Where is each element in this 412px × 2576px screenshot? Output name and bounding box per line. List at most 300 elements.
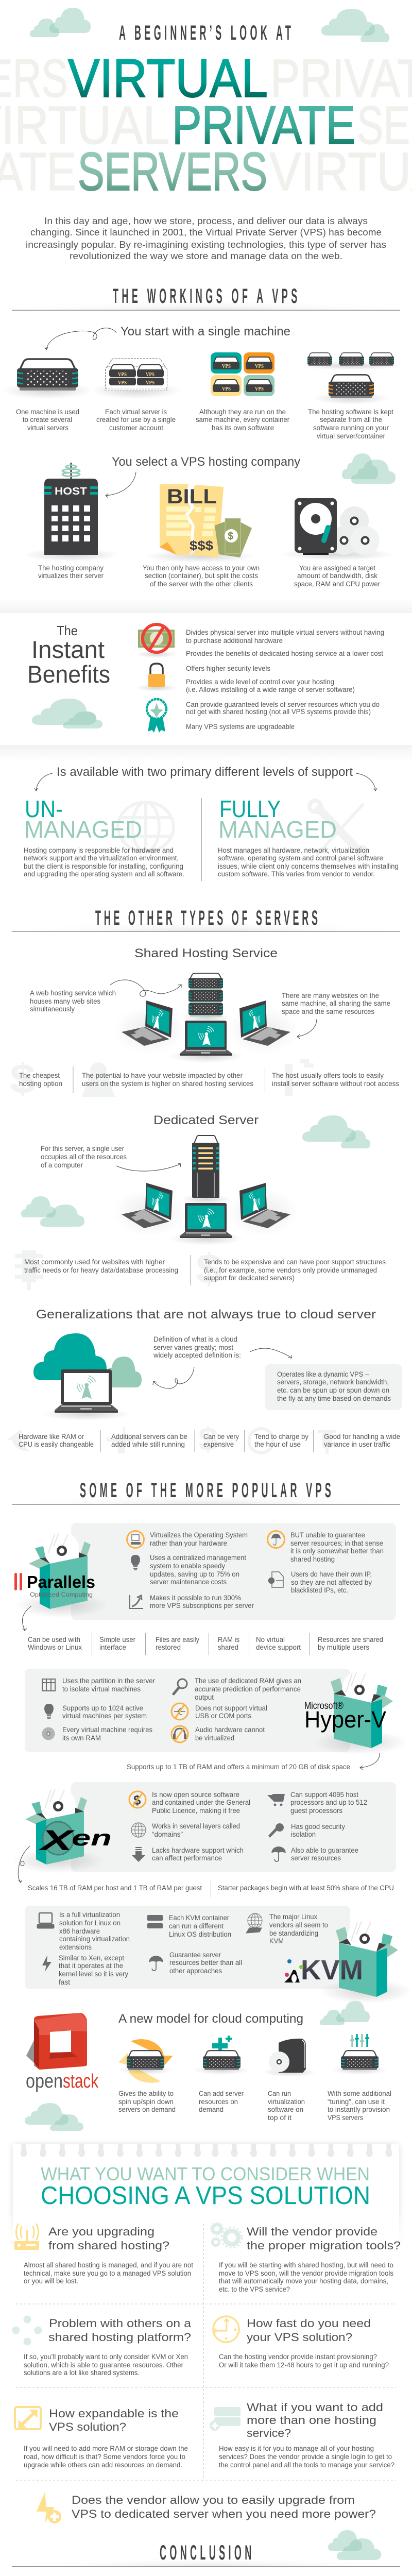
panel: definition box: etc. can be spun up or spun down on bbox=[277, 1386, 389, 1394]
list: xen right: Has good security bbox=[291, 1823, 345, 1831]
icon: torn bill and money: BILL bbox=[167, 485, 217, 508]
panel: unmanaged: MANAGED bbox=[24, 816, 142, 843]
icon: network nodes bbox=[12, 2315, 42, 2345]
list: hyper-v right: output bbox=[195, 1693, 214, 1701]
list: hyper-v right: Audio hardware cannot bbox=[195, 1726, 265, 1734]
icon: torn bill and money: $ bbox=[228, 531, 233, 542]
icon: computer in ring bbox=[127, 1531, 144, 1548]
icon: document bbox=[269, 1572, 283, 1587]
icon: two server units bbox=[147, 1915, 163, 1928]
captions: openstack: VPS servers bbox=[328, 2114, 363, 2122]
watermark icons: shared row bbox=[10, 1056, 314, 1103]
section heading: the workings of a VPS bbox=[12, 284, 400, 311]
question: multiple hosting: How easy is it for you to manage all of your hosting bbox=[219, 2445, 374, 2452]
captions: workings row one: separate from all the bbox=[320, 416, 382, 423]
text: hyper-v fact: Supports up to 1 TB of RAM and offers a minimum of 20 GB of disk space bbox=[127, 1763, 350, 1771]
panel: definition box: the fly at any time based on demands bbox=[277, 1395, 391, 1402]
arrow: parallels to row bbox=[22, 1606, 31, 1631]
row: shared hosting facts: hosting option bbox=[19, 1080, 62, 1088]
row: cloud facts: Good for handling a wide bbox=[324, 1433, 400, 1440]
icon: bulb bbox=[131, 1555, 140, 1570]
box: kvm bbox=[319, 1920, 412, 2004]
intro paragraph: revolutionized the way we store and manage data on the web. bbox=[70, 251, 342, 261]
arrow: curly to cloud laptop bbox=[153, 1367, 194, 1388]
row: shared hosting facts: The cheapest bbox=[19, 1072, 60, 1079]
list: xen left bbox=[152, 1791, 250, 1862]
row: parallels facts: Resources are shared bbox=[318, 1636, 383, 1643]
list: xen left: Works in several layers called bbox=[152, 1822, 240, 1830]
icon: open source no cost: $ bbox=[133, 1792, 141, 1808]
list: kvm col three: The major Linux bbox=[269, 1913, 317, 1921]
icon: hosting software separate from containers bbox=[300, 353, 403, 404]
icon: open source no cost bbox=[129, 1791, 146, 1808]
arrow: curly to machine bbox=[45, 328, 116, 350]
band: top of instant benefits bbox=[0, 598, 412, 613]
text: cloud definition bbox=[153, 1335, 241, 1359]
row: parallels facts: RAM is bbox=[218, 1636, 239, 1643]
list: xen left: Lacks hardware support which bbox=[152, 1846, 244, 1854]
background clouds: header left bbox=[30, 8, 91, 37]
icon: host building: HOST bbox=[55, 486, 87, 497]
logo: xen: en bbox=[72, 1826, 112, 1851]
logo: parallels: Optimized Computing bbox=[30, 1591, 93, 1598]
section heading: popular VPS bbox=[12, 1479, 400, 1505]
arrow: to definition box bbox=[250, 1348, 291, 1358]
panel: fully managed: software, operating system and control panel software bbox=[218, 854, 383, 862]
heading: choosing a VPS bbox=[41, 2163, 370, 2210]
list: parallels pros: Virtualizes the Operating System bbox=[150, 1531, 248, 1539]
section heading: other types of servers bbox=[12, 906, 400, 932]
band: bottom of instant benefits bbox=[0, 745, 412, 761]
icon: umbrella bbox=[271, 1846, 286, 1861]
question: expandable: upgrade while others can add resources on demand. bbox=[24, 2461, 182, 2469]
icon: virtual servers in outline: VPS bbox=[146, 372, 154, 378]
question: upgrading: Almost all shared hosting is managed, and if you are not bbox=[24, 2261, 193, 2269]
list: benefits: Offers higher security levels bbox=[186, 665, 270, 672]
list: benefits: Divides physical server into multiple virtual servers without having bbox=[186, 629, 384, 636]
list: kvm col one: containing virtualization bbox=[59, 1935, 130, 1943]
row: shared hosting facts: users on the system is higher on shared hosting services bbox=[82, 1080, 253, 1088]
icon: router bbox=[14, 2224, 39, 2250]
captions: openstack: demand bbox=[199, 2106, 224, 2113]
question: migration tools bbox=[219, 2225, 401, 2293]
list: kvm col one: fast bbox=[59, 1978, 70, 1986]
captions: workings row two bbox=[38, 564, 380, 588]
question: expandable: How expandable is the bbox=[49, 2407, 179, 2420]
captions: workings row one: customer account bbox=[109, 424, 163, 432]
captions: workings row one: has its own software bbox=[212, 424, 274, 432]
panel: unmanaged: network support and the virtualization environment, bbox=[24, 854, 179, 862]
list: xen right: server resources bbox=[291, 1854, 341, 1862]
logo: xen: X bbox=[38, 1824, 76, 1856]
subheading: single machine: You start with a single machine bbox=[121, 325, 290, 338]
row: dedicated facts: support for dedicated servers) bbox=[204, 1274, 295, 1282]
intro paragraph: changing. Since it launched in 2001, the Virtual Private Server (VPS) has become bbox=[30, 227, 382, 238]
box: parallels bbox=[15, 1532, 108, 1618]
icon: umbrella in ring bbox=[268, 1531, 284, 1548]
row: parallels facts: No virtual bbox=[256, 1636, 285, 1643]
icon: partition grid bbox=[42, 1679, 55, 1691]
list: kvm col two: can run a different bbox=[169, 1922, 224, 1930]
panel: unmanaged: but the client is responsible for installing, configuring bbox=[24, 862, 183, 870]
captions: workings row one bbox=[16, 408, 393, 440]
list: hyper-v right: Does not support virtual bbox=[195, 1704, 267, 1712]
heading: the instant benefits: Benefits bbox=[27, 660, 110, 688]
text: cloud definition: Definition of what is a cloud bbox=[153, 1335, 237, 1343]
question: expandable: If you will need to add more RAM or storage down the bbox=[24, 2445, 188, 2452]
icon: padlock bbox=[136, 664, 177, 691]
icon: cart bbox=[267, 1794, 285, 1806]
arrow: to tower bbox=[116, 1163, 181, 1171]
list: parallels pros: updates, saving up to 75% on bbox=[150, 1570, 239, 1578]
question: upgrade to dedicated: VPS to dedicated server when you need more power? bbox=[72, 2507, 376, 2520]
row: parallels facts: restored bbox=[156, 1643, 181, 1651]
question: expandable: road, how difficult is that? Some vendors force you to bbox=[24, 2453, 185, 2461]
question: shared platform: Problem with others on a bbox=[49, 2317, 192, 2330]
list: kvm col two: Each KVM container bbox=[169, 1914, 229, 1922]
list: parallels cons: it is only somewhat better than bbox=[290, 1547, 384, 1555]
watermark icons: dedicated row: $ bbox=[196, 1246, 222, 1293]
captions: workings row two: of the server with the other clients bbox=[150, 580, 253, 588]
icon: host building bbox=[24, 463, 118, 562]
row: xen facts: Scales 16 TB of RAM per host and 1 TB of RAM per guest bbox=[28, 1884, 202, 1892]
row: shared hosting facts: install server software without root access bbox=[272, 1080, 399, 1088]
row: shared hosting facts bbox=[19, 1066, 399, 1093]
question: how fast: Can the hosting vendor provide instant provisioning? bbox=[219, 2353, 377, 2361]
question: migration tools: Will the vendor provide bbox=[247, 2225, 377, 2238]
text: single user: occupies all of the resources bbox=[41, 1153, 127, 1161]
text: web hosting description: houses many web sites bbox=[30, 997, 100, 1005]
captions: openstack: Can add server bbox=[199, 2090, 244, 2097]
list: benefits: Can provide guaranteed levels of server resources which you do bbox=[186, 701, 380, 708]
question: upgrading: from shared hosting? bbox=[48, 2239, 169, 2252]
panel: notepaper bbox=[0, 2144, 412, 2247]
icon: clock bbox=[213, 2316, 239, 2342]
panel: fully managed: Host manages all hardware, network, virtualization bbox=[218, 846, 369, 854]
list: xen left: “domains” bbox=[152, 1831, 183, 1838]
list: xen left: and contained under the General bbox=[152, 1799, 250, 1806]
main title: PRIVATE bbox=[172, 95, 355, 156]
icon: lightning plus bbox=[37, 2492, 61, 2523]
captions: workings row one: The hosting software is kept bbox=[308, 408, 393, 416]
text: many websites bbox=[282, 992, 390, 1015]
icon: three laptops, dedicated bbox=[113, 1183, 299, 1245]
arrow: to unmanaged bbox=[35, 773, 53, 791]
row: shared hosting facts: The host usually offers tools to easily bbox=[272, 1072, 384, 1079]
captions: workings row one: to create several bbox=[23, 416, 72, 423]
list: benefits: to purchase additional hardware bbox=[186, 637, 283, 645]
captions: workings row one: One machine is used bbox=[16, 408, 79, 416]
main title: VIRTUAL bbox=[68, 48, 268, 109]
row: dedicated facts: traffic needs or for heavy data/database processing bbox=[24, 1266, 178, 1274]
list: parallels cons: so they are not affected by bbox=[291, 1579, 372, 1586]
captions: workings row two: You then only have access to your own bbox=[143, 564, 260, 572]
main title bbox=[68, 48, 355, 202]
list: benefits: (i.e. Allows installing of a wide range of server software) bbox=[186, 686, 355, 693]
intro paragraph: In this day and age, how we store, process, and deliver our data is always bbox=[44, 216, 368, 226]
question: shared platform: solution, which is able to guarantee resources. Other bbox=[24, 2361, 183, 2369]
list: parallels cons bbox=[290, 1531, 384, 1594]
text: cloud definition: server varies greatly; most bbox=[153, 1344, 233, 1351]
row: parallels facts: by multiple users bbox=[318, 1643, 369, 1651]
logo: parallels bbox=[14, 1572, 95, 1598]
row: xen facts bbox=[28, 1881, 394, 1897]
captions: openstack bbox=[118, 2090, 391, 2122]
list: kvm col one: Similar to Xen, except bbox=[59, 1954, 124, 1962]
captions: openstack: servers on demand bbox=[118, 2106, 176, 2113]
panel: unmanaged bbox=[24, 795, 184, 878]
text: single user bbox=[41, 1145, 127, 1169]
icon: four coloured containers: VPS bbox=[255, 386, 264, 392]
heading: the instant benefits: The bbox=[57, 623, 78, 638]
list: benefits: not get with shared hosting (not all VPS systems provide this) bbox=[186, 708, 371, 716]
row: dedicated facts: (i.e., for example, some vendors only provide unmanaged bbox=[204, 1266, 377, 1274]
icon: four coloured containers: VPS bbox=[222, 386, 231, 392]
panel: definition box: servers, storage, network bandwidth, bbox=[277, 1378, 389, 1386]
list: kvm col three: vendors all seem to bbox=[269, 1921, 328, 1929]
list: hyper-v left bbox=[62, 1677, 155, 1742]
list: hyper-v left: virtual machines per system bbox=[62, 1712, 147, 1720]
list: parallels pros: server maintenance costs bbox=[150, 1578, 227, 1586]
row: parallels facts: interface bbox=[99, 1643, 126, 1651]
question: upgrade to dedicated: Does the vendor allow you to easily upgrade from bbox=[72, 2494, 355, 2506]
question: how fast: your VPS solution? bbox=[247, 2331, 352, 2344]
question: migration tools: move to VPS soon, will the vendor provide migration tools bbox=[219, 2269, 393, 2277]
captions: openstack: Gives the ability to bbox=[118, 2090, 174, 2097]
panel: hyper-v background bbox=[25, 1669, 350, 1752]
question: shared platform: solutions are a lot like shared systems. bbox=[24, 2369, 140, 2377]
captions: workings row one: Although they are run on the bbox=[199, 408, 286, 416]
row: cloud facts: Hardware like RAM or bbox=[19, 1433, 84, 1440]
list: xen left: Is now open source software bbox=[152, 1791, 239, 1799]
question: shared platform: shared hosting platform? bbox=[48, 2331, 191, 2344]
panel: definition box bbox=[265, 1364, 402, 1410]
list: parallels pros: more VPS subscriptions per server bbox=[150, 1602, 254, 1609]
list: xen right: guest processors bbox=[290, 1807, 342, 1815]
icon: growth chart bbox=[130, 1595, 143, 1608]
background clouds: dedicated right bbox=[302, 1115, 370, 1148]
list: kvm col one: extensions bbox=[59, 1943, 92, 1951]
section heading: conclusion bbox=[12, 2541, 400, 2567]
list: kvm col one: solution for Linux on bbox=[59, 1919, 121, 1927]
list: hyper-v left: to isolate virtual machines bbox=[62, 1685, 141, 1693]
icon: four coloured containers: VPS bbox=[255, 364, 264, 369]
panel: definition box: Operates like a dynamic VPS – bbox=[277, 1370, 369, 1378]
text: web hosting description: simultaneously bbox=[30, 1005, 75, 1013]
list: kvm col two: Guarantee server bbox=[169, 1951, 221, 1959]
row: shared hosting facts: The potential to have your website impacted by other bbox=[82, 1072, 243, 1079]
subheading: shared hosting: Shared Hosting Service bbox=[134, 946, 278, 960]
icon: virtual servers in outline bbox=[91, 359, 182, 399]
list: parallels cons: BUT unable to guarantee bbox=[290, 1531, 365, 1539]
row: cloud facts: CPU is easily changeable bbox=[19, 1440, 94, 1448]
logo: xen bbox=[38, 1822, 112, 1856]
list: parallels pros: Uses a centralized management bbox=[150, 1554, 246, 1562]
row: cloud facts: variance in user traffic bbox=[324, 1440, 390, 1448]
row: parallels facts: shared bbox=[218, 1643, 238, 1651]
question: migration tools: If you will be starting with shared hosting, but will need to bbox=[219, 2261, 393, 2269]
background clouds: conclusion bbox=[328, 2530, 381, 2560]
captions: workings row two: amount of bandwidth, disk bbox=[297, 572, 377, 580]
text: web hosting description bbox=[30, 989, 116, 1013]
captions: openstack: resources on bbox=[199, 2098, 238, 2106]
row: cloud facts bbox=[19, 1430, 400, 1452]
list: kvm col three: be standardizing bbox=[269, 1929, 318, 1937]
list: kvm col three: KVM bbox=[269, 1937, 284, 1945]
captions: openstack: With some additional bbox=[328, 2090, 391, 2097]
row: dedicated facts: Most commonly used for websites with higher bbox=[24, 1258, 165, 1266]
captions: openstack: virtualization bbox=[268, 2098, 305, 2106]
heading: choosing a VPS: WHAT YOU WANT TO CONSIDER WHEN bbox=[41, 2163, 370, 2184]
list: parallels pros: system to enable speedy bbox=[150, 1562, 225, 1570]
list: kvm col three bbox=[269, 1913, 328, 1945]
icon: virtualization software bbox=[263, 2039, 316, 2077]
icon: globe bbox=[131, 1823, 146, 1837]
watermark icons: shared row: $ bbox=[10, 1056, 36, 1103]
watermark icons: dedicated row bbox=[15, 1246, 222, 1293]
captions: openstack: Can run bbox=[268, 2090, 291, 2097]
question: how fast: Or will it take them 12-48 hours to get it up and running? bbox=[219, 2361, 389, 2369]
list: xen right bbox=[290, 1791, 367, 1862]
background clouds: header right bbox=[321, 9, 389, 42]
question: multiple hosting: services? Does the vendor provide a single login to get to bbox=[219, 2453, 392, 2461]
icon: no audio bbox=[171, 1726, 188, 1742]
text: many websites: same machine, all sharing the same bbox=[282, 999, 390, 1007]
row: parallels facts bbox=[28, 1633, 383, 1655]
list: benefits: Provides the benefits of dedicated hosting service at a lower cost bbox=[186, 650, 383, 657]
arrow: to host building bbox=[106, 472, 136, 498]
subheading: select a hosting company: You select a VPS hosting company bbox=[112, 455, 300, 469]
captions: openstack: software on bbox=[268, 2106, 303, 2113]
row: cloud facts: Additional servers can be bbox=[111, 1433, 187, 1440]
text: many websites: There are many websites on the bbox=[282, 992, 379, 999]
row: parallels facts: Windows or Linux bbox=[28, 1643, 82, 1651]
list: parallels cons: blacklisted IPs, etc. bbox=[291, 1586, 348, 1594]
captions: workings row two: You are assigned a target bbox=[299, 564, 375, 572]
question: shared platform: If so, you’ll probably want to only consider KVM or Xen bbox=[24, 2353, 188, 2361]
icon: stacked server bbox=[181, 973, 231, 1023]
list: benefits bbox=[186, 629, 384, 731]
arrow: to fully managed bbox=[356, 773, 377, 791]
panel: kvm background bbox=[25, 1906, 350, 1989]
text: web hosting description: A web hosting service which bbox=[30, 989, 116, 997]
row: cloud facts: expensive bbox=[203, 1440, 234, 1448]
logo: hyper-v: Microsoft® bbox=[304, 1701, 344, 1711]
list: kvm col two bbox=[169, 1914, 242, 1975]
captions: workings row one: Each virtual server is bbox=[105, 408, 167, 416]
list: parallels cons: server resources; in that sense bbox=[290, 1539, 383, 1547]
subheading: generalizations: Generalizations that are not always true to cloud server bbox=[36, 1308, 376, 1321]
background clouds: under benefits heading bbox=[32, 699, 102, 728]
icon: globe in hand bbox=[246, 1913, 262, 1933]
panel: fully managed: FULLY bbox=[219, 795, 281, 822]
captions: workings row two: virtualizes their server bbox=[38, 572, 104, 580]
list: parallels pros: rather than your hardware bbox=[150, 1539, 227, 1547]
logo: openstack: open bbox=[26, 2071, 63, 2092]
text: single user: For this server, a single user bbox=[41, 1145, 124, 1153]
list: kvm col two: resources better than all bbox=[169, 1959, 242, 1967]
list: hyper-v right: accurate prediction of performance bbox=[195, 1685, 301, 1693]
icon: add resources bbox=[193, 2036, 250, 2075]
panel: unmanaged: Hosting company is responsible for hardware and bbox=[24, 846, 174, 854]
captions: workings row one: created for use by a single bbox=[96, 416, 176, 423]
section heading: other types of servers: THE OTHER TYPES OF SERVERS bbox=[95, 906, 318, 929]
panel: unmanaged: UN- bbox=[25, 795, 63, 822]
list: parallels pros: Makes it possible to run 300% bbox=[150, 1594, 241, 1602]
icon: virtual servers in outline: VPS bbox=[118, 372, 127, 378]
captions: workings row two: section (container), but split the costs bbox=[145, 572, 258, 580]
panel: unmanaged: and upgrading the operating system and all software. bbox=[24, 870, 184, 878]
icon: down arrow bbox=[132, 1847, 145, 1862]
list: parallels cons: shared hosting bbox=[290, 1555, 335, 1563]
arrow: xen to facts bbox=[18, 1846, 30, 1883]
heading: the instant benefits: Instant bbox=[31, 636, 105, 663]
row: parallels facts: Files are easily bbox=[156, 1636, 199, 1643]
icon: expand bbox=[15, 2407, 41, 2429]
icon: spin up and down bbox=[117, 2039, 174, 2083]
icon: no USB bbox=[171, 1703, 188, 1720]
panel: fully managed: custom software. This varies from vendor to vendor. bbox=[218, 870, 375, 878]
captions: openstack: top of it bbox=[268, 2114, 291, 2122]
list: kvm col two: other approaches bbox=[169, 1967, 222, 1975]
list: kvm col one bbox=[59, 1911, 130, 1986]
question: upgrading bbox=[24, 2225, 193, 2285]
icon: four coloured containers bbox=[211, 352, 274, 396]
icon: RAM disc bbox=[42, 1727, 55, 1740]
icon: award ribbon bbox=[147, 699, 166, 733]
icon: add server bbox=[210, 2407, 241, 2431]
subheading: dedicated server: Dedicated Server bbox=[153, 1113, 259, 1127]
list: hyper-v left: Uses the partition in the server bbox=[62, 1677, 155, 1685]
captions: workings row one: software running on your bbox=[313, 424, 389, 432]
icon: lightning bbox=[42, 1955, 52, 1972]
row: cloud facts: Tend to charge by bbox=[254, 1433, 308, 1440]
section heading: conclusion: CONCLUSION bbox=[160, 2541, 251, 2564]
list: hyper-v right bbox=[195, 1677, 301, 1742]
title kicker: A BEGINNER’S LOOK AT bbox=[119, 21, 291, 44]
row: cloud facts: added while still running bbox=[111, 1440, 185, 1448]
main title: SERVERS bbox=[78, 142, 267, 202]
heading: the instant benefits bbox=[27, 623, 110, 688]
row: xen facts: Starter packages begin with at least 50% share of the CPU bbox=[218, 1884, 394, 1892]
section heading: popular VPS: SOME OF THE MORE POPULAR VPS bbox=[80, 1479, 331, 1502]
logo: openstack: stack bbox=[63, 2071, 99, 2092]
icon: gears bbox=[211, 2223, 242, 2248]
captions: workings row one: virtual servers bbox=[27, 424, 68, 432]
icon: cloud laptop bbox=[33, 1333, 142, 1420]
question: multiple hosting: the control panel and all the tools to manage your service? bbox=[219, 2461, 394, 2469]
list: hyper-v left: Supports up to 1024 active bbox=[62, 1704, 143, 1712]
question: upgrading: or you will be lost. bbox=[24, 2277, 78, 2285]
list: parallels pros bbox=[150, 1531, 254, 1609]
panel: fully managed: MANAGED bbox=[218, 816, 337, 843]
arrow: to right laptop bbox=[297, 1019, 317, 1039]
icon: three laptops, shared bbox=[113, 1001, 299, 1063]
background clouds: openstack heading bbox=[320, 2001, 370, 2025]
panel: fully managed bbox=[218, 795, 399, 878]
row: parallels facts: Simple user bbox=[99, 1636, 135, 1643]
captions: workings row two: space, RAM and CPU power bbox=[294, 580, 380, 588]
icon: umbrella bbox=[149, 1956, 163, 1971]
panel: parallels background bbox=[71, 1523, 396, 1620]
subheading: new model: A new model for cloud computing bbox=[118, 2012, 303, 2026]
question: multiple hosting: What if you want to add bbox=[247, 2401, 383, 2414]
list: kvm col one: x86 hardware bbox=[59, 1927, 100, 1935]
list: hyper-v left: Every virtual machine requires bbox=[62, 1726, 152, 1734]
logo: openstack bbox=[26, 2013, 99, 2092]
background clouds: below openstack bbox=[25, 2103, 83, 2131]
background clouds: right of hosting heading bbox=[342, 453, 396, 484]
